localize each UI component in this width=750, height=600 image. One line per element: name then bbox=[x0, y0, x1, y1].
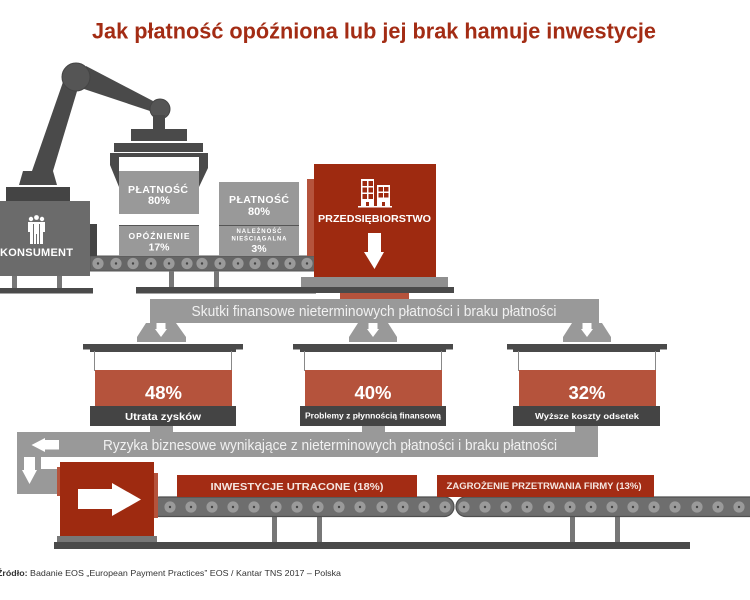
panel: przedsiębiorstwo bbox=[136, 164, 454, 299]
panel: wyższe koszty odsetek bbox=[507, 344, 667, 426]
panel: wyższe koszty odsetek: 32% bbox=[568, 383, 606, 403]
panel: utrata zysków bbox=[83, 344, 243, 426]
panel: utrata zysków: 48% bbox=[145, 383, 182, 403]
konsument label: KONSUMENT bbox=[0, 247, 73, 259]
panel: red box with arrow bbox=[57, 462, 158, 542]
box: płatność 80% i należność nieściągalna 3%: PŁATNOŚĆ bbox=[229, 193, 289, 206]
icon: people bbox=[28, 215, 45, 244]
box: opóźnienie 17% bbox=[119, 225, 199, 256]
band: ryzyka biznesowe: Ryzyka biznesowe wynikające z nieterminowych płatności i braku płatności bbox=[103, 438, 557, 454]
bar: zagrożenie przetrwania firmy bbox=[437, 475, 654, 497]
box: płatność 80%: PŁATNOŚĆ bbox=[128, 183, 188, 196]
panel: utrata zysków: Utrata zysków bbox=[125, 411, 202, 423]
source note: Źródło: Badanie EOS „European Payment Practices” EOS / Kantar TNS 2017 – Polska bbox=[0, 568, 341, 578]
band: skutki finansowe: Skutki finansowe nieterminowych płatności i braku płatności bbox=[192, 304, 556, 320]
box: płatność 80% i należność nieściągalna 3% bbox=[219, 182, 299, 256]
box: płatność 80% i należność nieściągalna 3%: NIEŚCIĄGALNA bbox=[232, 236, 287, 242]
bottom conveyor belts bbox=[54, 497, 750, 549]
panel: konsument bbox=[0, 201, 97, 294]
bar: zagrożenie przetrwania firmy: ZAGROŻENIE PRZETRWANIA FIRMY (13%) bbox=[446, 481, 642, 492]
top conveyor belt bbox=[90, 256, 316, 294]
box: płatność 80% i należność nieściągalna 3%: NALEŻNOŚĆ bbox=[236, 227, 282, 235]
robot arm bbox=[6, 63, 208, 201]
panel: problemy z płynnością finansową bbox=[293, 344, 453, 426]
bar: inwestycje utracone: INWESTYCJE UTRACONE (18%) bbox=[210, 481, 384, 493]
panel: problemy z płynnością finansową: Problemy z płynnością finansową bbox=[305, 412, 442, 420]
box: płatność 80% bbox=[119, 171, 199, 214]
band: ryzyka biznesowe bbox=[17, 426, 598, 494]
box: płatność 80% i należność nieściągalna 3%: 3% bbox=[251, 243, 267, 255]
icon: building bbox=[358, 179, 392, 208]
arrow funnel 1 bbox=[137, 323, 186, 342]
panel: wyższe koszty odsetek: Wyższe koszty odsetek bbox=[535, 411, 639, 421]
arrow funnel 3 bbox=[563, 323, 611, 342]
arrow right bbox=[78, 483, 141, 516]
panel: problemy z płynnością finansową: 40% bbox=[354, 383, 392, 403]
arrow left bbox=[32, 438, 59, 452]
title: Jak płatność opóźniona lub jej brak hamuje inwestycje bbox=[92, 18, 656, 44]
box: opóźnienie 17%: 17% bbox=[148, 242, 170, 254]
box: płatność 80%: 80% bbox=[148, 195, 170, 207]
przedsiębiorstwo label: PRZEDSIĘBIORSTWO bbox=[318, 213, 431, 225]
band: skutki finansowe bbox=[137, 299, 611, 342]
box: opóźnienie 17%: OPÓŹNIENIE bbox=[128, 230, 190, 241]
arrow down small bbox=[22, 457, 37, 484]
arrow funnel 2 bbox=[349, 323, 397, 342]
bar: inwestycje utracone bbox=[177, 475, 417, 497]
arrow down bbox=[364, 233, 384, 269]
box: płatność 80% i należność nieściągalna 3%: 80% bbox=[248, 206, 270, 218]
